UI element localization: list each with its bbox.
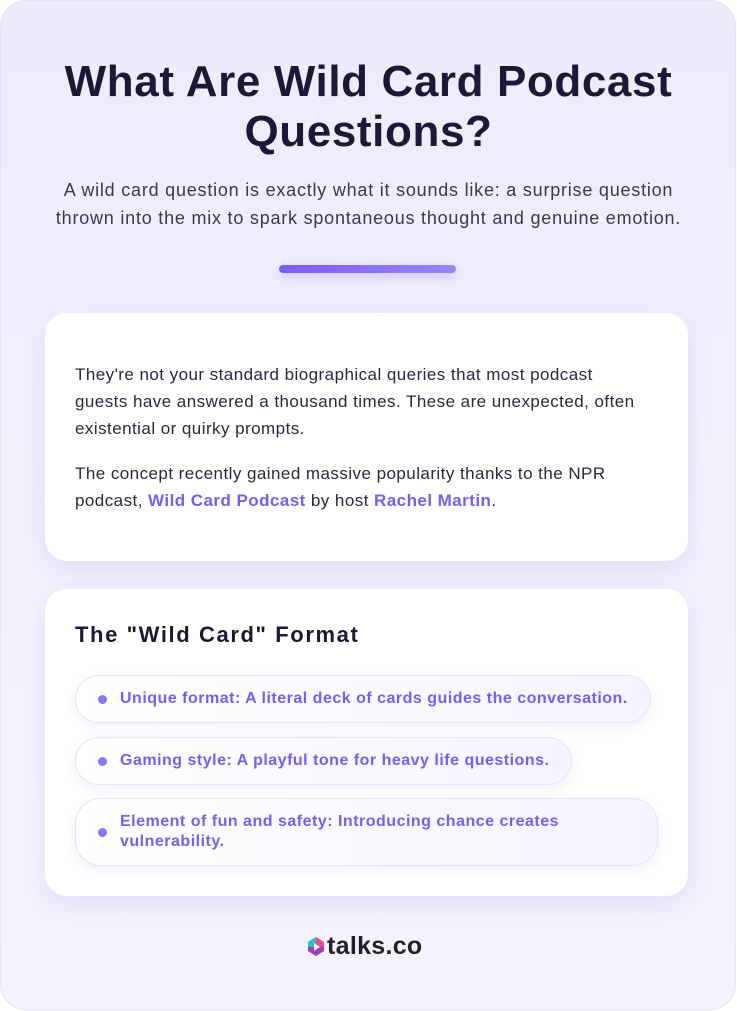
logo text: talks.co [327, 932, 423, 960]
pill: unique format [75, 675, 651, 723]
subtitle: thrown into the mix to spark spontaneous thought and genuine emotion. [56, 208, 681, 228]
pill: gaming style [75, 737, 572, 785]
pill: gaming style: Gaming style: A playful tone for heavy life questions. [120, 752, 549, 769]
icon: logo mark [308, 937, 324, 956]
title [64, 57, 672, 156]
heading: The "Wild Card" Format [75, 622, 359, 647]
subtitle [56, 180, 681, 228]
text block: intro paragraph 1: They're not your standard biographical queries that most podcast guests have answered a thousand times. These are unexpected, often existential or quirky prompts. [75, 365, 635, 438]
panel: intro [45, 313, 688, 561]
pill: unique format: Unique format: A literal deck of cards guides the conversation. [120, 690, 628, 707]
pill: fun and safety [75, 798, 658, 866]
title: What Are Wild Card Podcast [65, 57, 672, 106]
panel: format [45, 589, 688, 896]
title: Questions? [244, 107, 493, 156]
accent bar [279, 265, 456, 273]
pill: fun and safety: Element of fun and safety: Introducing chance creates [120, 813, 559, 830]
pill: fun and safety: vulnerability. [120, 833, 225, 850]
text block: intro paragraph 2: The concept recently gained massive popularity thanks to the NPR podcast, Wild Card Podcast by host Rachel Martin. [75, 464, 606, 510]
logo [308, 932, 423, 960]
subtitle: A wild card question is exactly what it sounds like: a surprise question [64, 180, 673, 200]
